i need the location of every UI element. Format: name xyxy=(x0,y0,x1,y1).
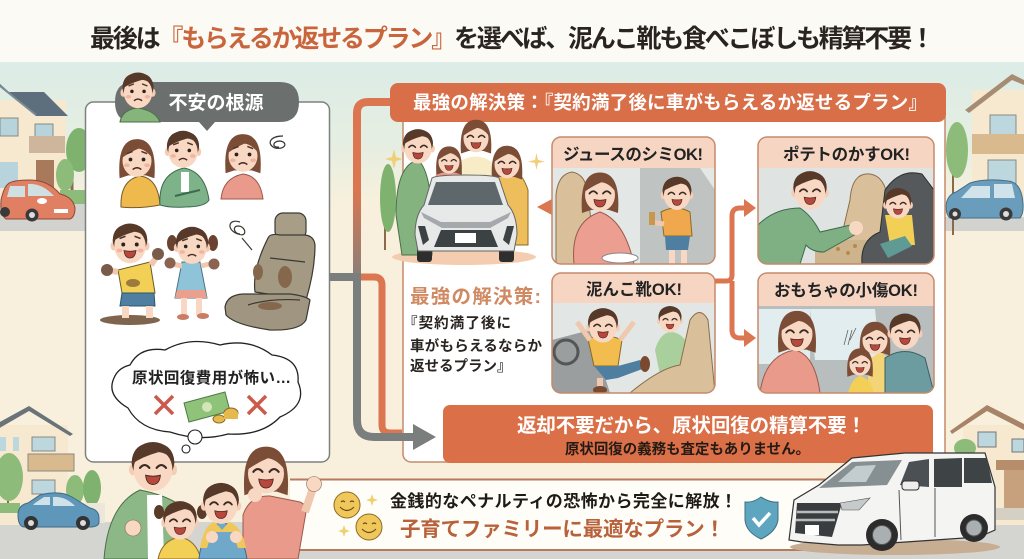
solution text block xyxy=(403,286,542,375)
card: toy scratches: おもちゃの小傷OK! xyxy=(774,281,918,300)
happy family foreground xyxy=(104,442,322,559)
white minivan xyxy=(789,453,1000,555)
card: potato crumbs: ポテトのかすOK! xyxy=(783,144,910,164)
solution text block: 『契約満了後に xyxy=(403,314,511,332)
connector: orange line to result band xyxy=(358,277,402,433)
card: juice stain xyxy=(552,137,715,264)
solution text block: 返せるプラン』 xyxy=(410,358,512,375)
heading pill: 不安の根源 xyxy=(168,92,264,114)
solution header xyxy=(390,83,946,122)
result band: 返却不要だから、原状回復の精算不要！ xyxy=(517,414,866,437)
jumping boy xyxy=(577,308,650,394)
banner message: 金銭的なペナルティの恐怖から完全に解放！ xyxy=(390,491,737,511)
card: muddy shoes xyxy=(552,273,715,394)
father in back xyxy=(655,306,685,372)
father xyxy=(104,442,180,559)
mother xyxy=(243,447,322,559)
muddy girl xyxy=(164,227,220,320)
child in car seat xyxy=(862,173,934,264)
worried man xyxy=(120,72,160,122)
bottom banner xyxy=(290,479,850,550)
tree behind right panel xyxy=(380,164,396,250)
father pointing xyxy=(758,171,863,264)
banner highlight: 子育てファミリーに最適なプラン！ xyxy=(400,518,725,541)
muddy boy xyxy=(100,224,164,325)
happy boy xyxy=(649,177,693,264)
result band xyxy=(443,405,933,463)
family with car xyxy=(385,120,545,265)
worried woman xyxy=(221,134,285,199)
house: bottom left xyxy=(0,406,105,525)
solution text block: 車がもらえるならか xyxy=(410,337,542,355)
shield icon xyxy=(745,497,778,539)
panel: anxiety source xyxy=(86,72,330,462)
connector: orange line to solution header xyxy=(357,102,390,280)
banknote and coins xyxy=(184,392,238,423)
card: toy scratches xyxy=(758,273,934,393)
car: blue top right xyxy=(946,180,1023,220)
arrow: from stain card to family xyxy=(537,199,552,215)
car: blue bottom left xyxy=(18,493,99,530)
solution text block: 最強の解決策: xyxy=(410,286,541,308)
family looking at scratch xyxy=(760,311,934,393)
house: top right xyxy=(946,74,1024,235)
stained car seat xyxy=(225,213,315,330)
branching arrows between cards xyxy=(715,199,756,347)
worried couple xyxy=(119,131,209,208)
thought bubble: fear of restoration cost xyxy=(112,341,301,453)
thought bubble: fear of restoration cost: 原状回復費用が怖い… xyxy=(132,368,291,387)
solution header: 最強の解決策：『契約満了後に車がもらえるか返せるプラン』 xyxy=(413,92,927,113)
card: muddy shoes: 泥んこ靴OK! xyxy=(586,279,682,299)
title: 最後は『もらえるか返せるプラン』を選べば、泥んこ靴も食べこぼしも精算不要！ xyxy=(90,25,935,53)
smiley icons xyxy=(334,492,382,540)
heading pill xyxy=(115,82,299,131)
car: orange top left xyxy=(0,180,75,222)
boy xyxy=(199,483,247,559)
car front view xyxy=(415,175,517,262)
cross marks xyxy=(155,396,266,414)
girl xyxy=(154,501,207,559)
card: potato crumbs xyxy=(758,137,934,264)
house: top left xyxy=(0,84,92,205)
panel: strongest solution xyxy=(385,83,946,463)
card: juice stain: ジュースのシミOK! xyxy=(563,146,703,164)
house: bottom right xyxy=(950,405,1024,525)
woman with cloth xyxy=(574,172,638,264)
connector: grey arrow to result band xyxy=(329,277,436,450)
result band: 原状回復の義務も査定もありません。 xyxy=(565,440,810,458)
